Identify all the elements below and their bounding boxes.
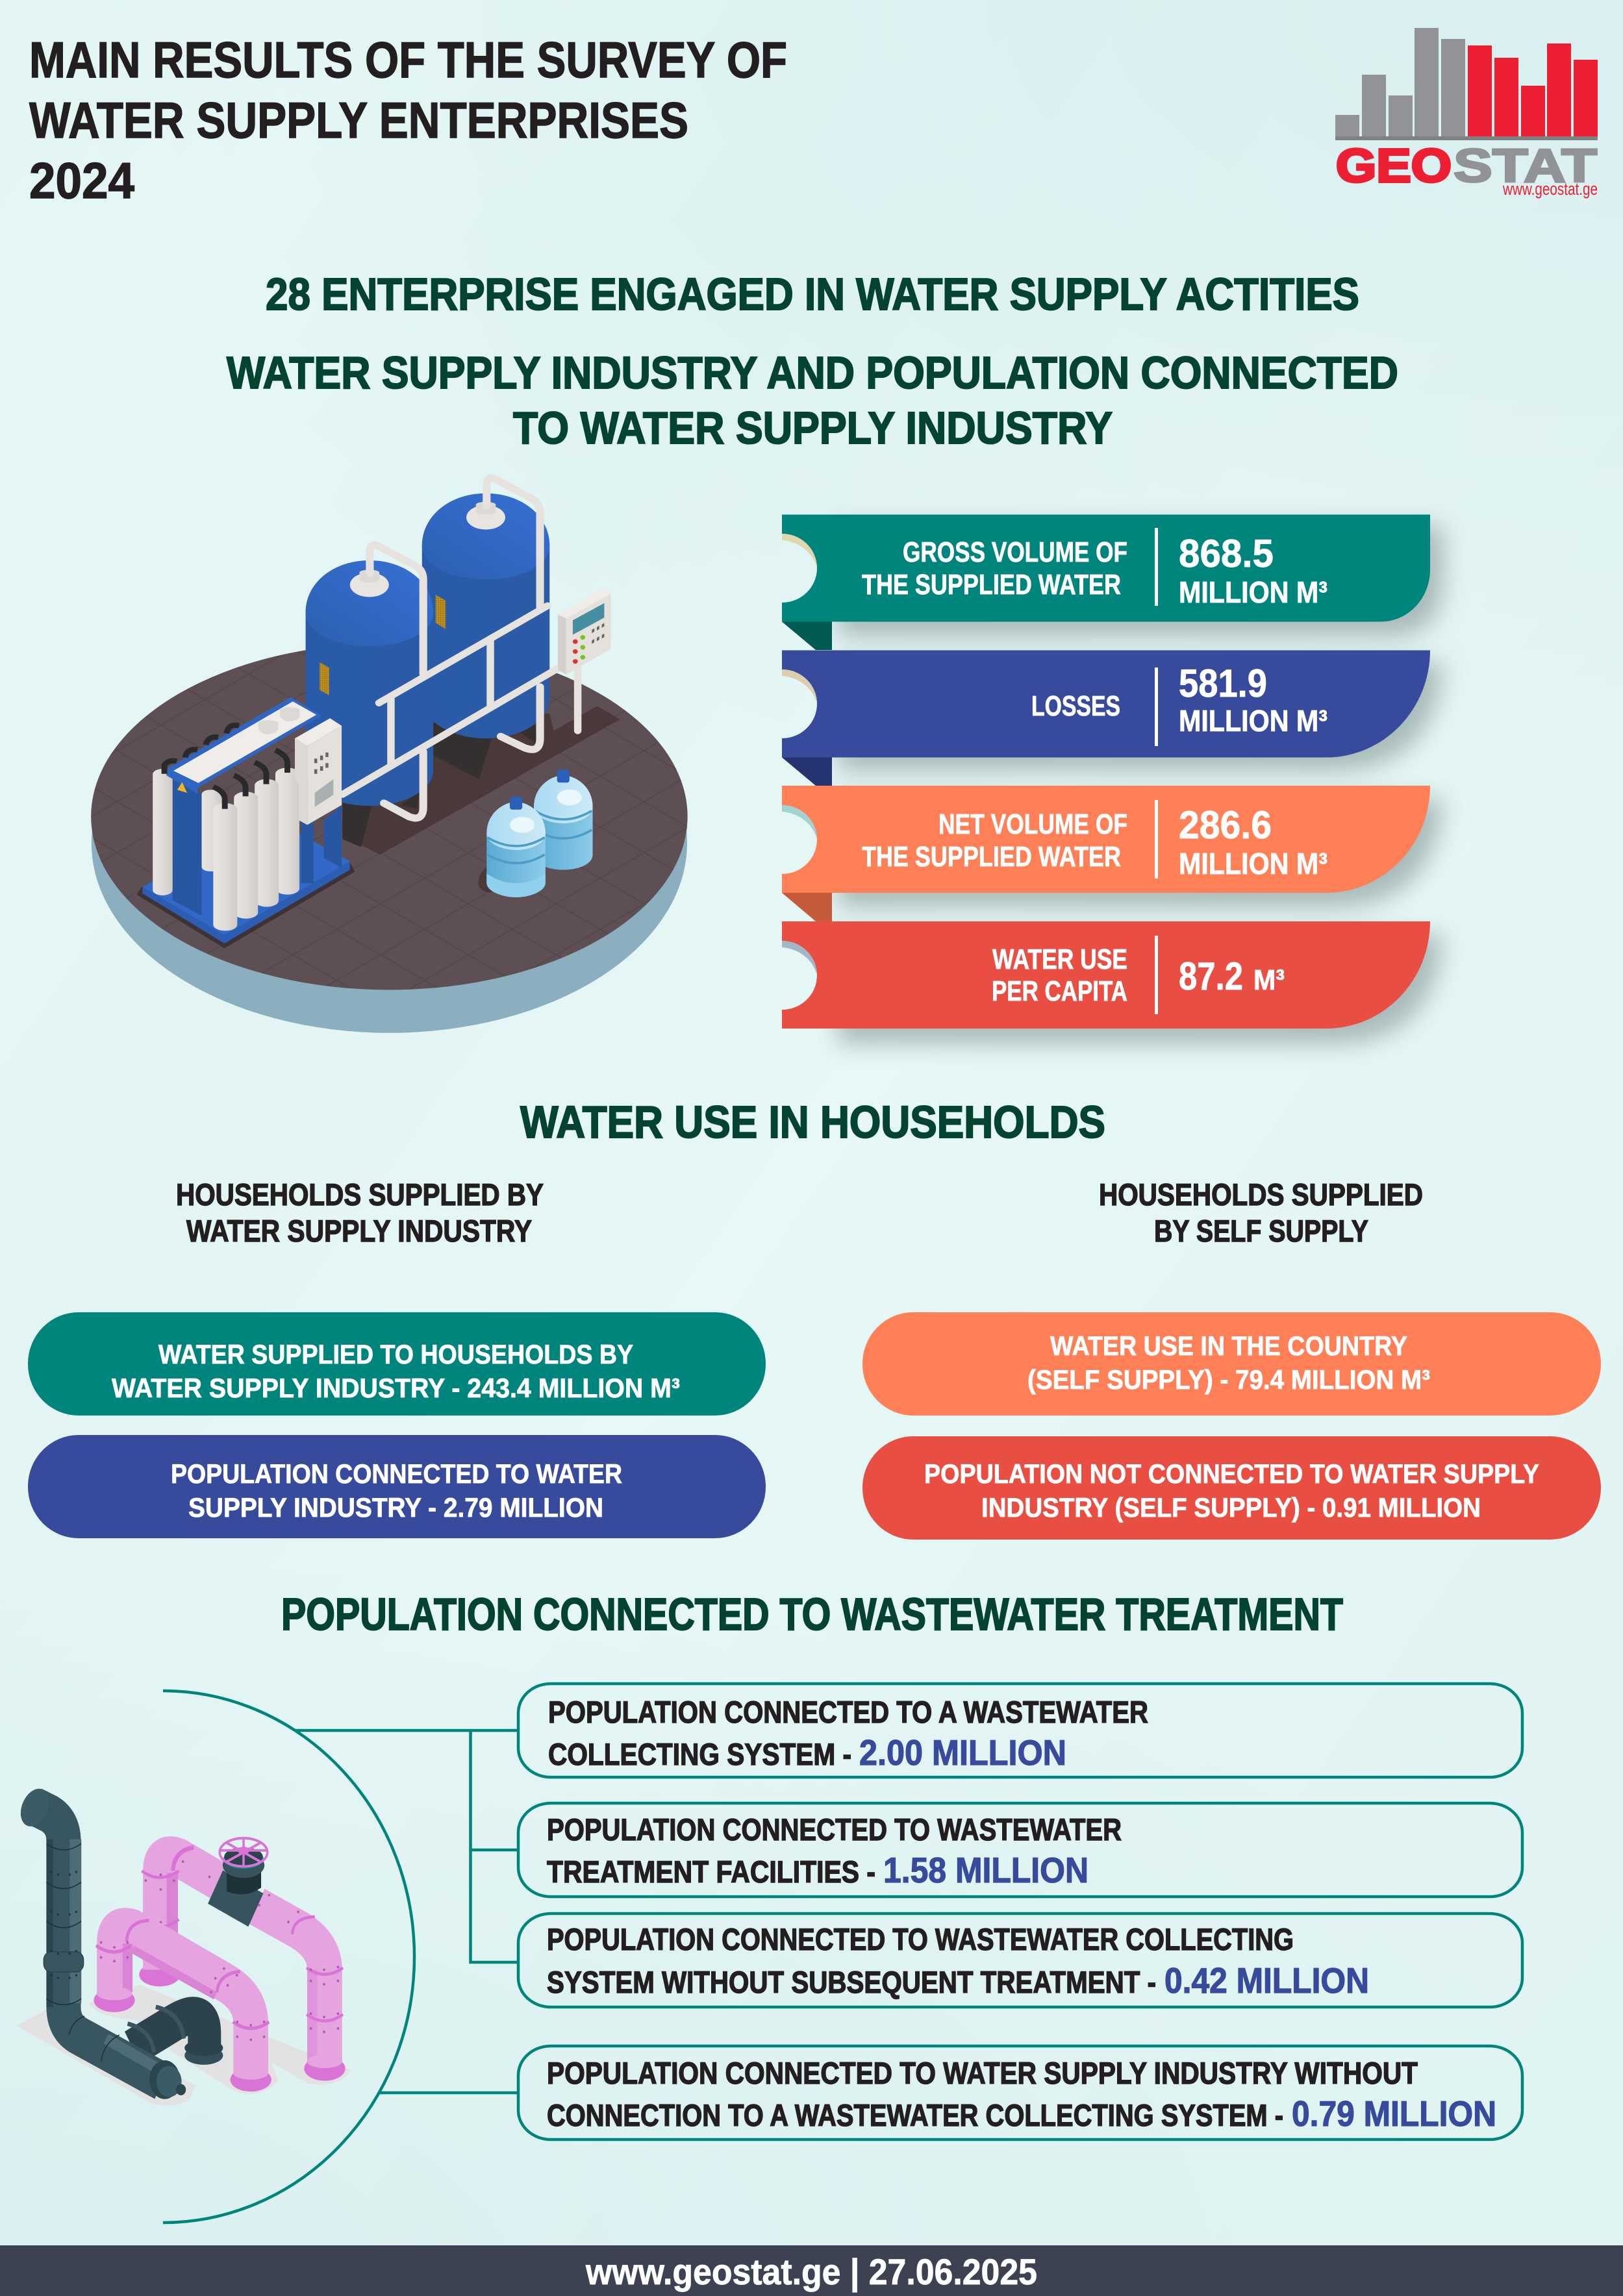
subheading: households self supply bbox=[1099, 1177, 1423, 1248]
icon: pink pipe front bbox=[94, 1921, 271, 2091]
logo: Geostat bbox=[1335, 28, 1598, 199]
logo: Geostat: www.geostat.ge bbox=[1502, 179, 1598, 199]
subheading: households self supply: HOUSEHOLDS SUPPLIED bbox=[1099, 1177, 1423, 1212]
banner: per capita bbox=[782, 921, 1430, 1029]
pill: population not connected: INDUSTRY (SELF SUPPLY) - 0.91 MILLION bbox=[981, 1492, 1481, 1523]
heading: water use in households: WATER USE IN HOUSEHOLDS bbox=[520, 1097, 1105, 1147]
banner: gross volume: 868.5 bbox=[1179, 532, 1274, 575]
footer bbox=[0, 2245, 1623, 2296]
title: MAIN RESULTS OF THE SURVEY OF bbox=[29, 31, 787, 88]
panel: treatment facilities: 1.58 MILLION bbox=[883, 1850, 1088, 1890]
logo: Geostat: GEO bbox=[1336, 140, 1452, 192]
banner: net volume: 286.6 bbox=[1179, 803, 1272, 847]
banner: gross volume: MILLION M³ bbox=[1179, 575, 1327, 609]
panel: without collecting system: CONNECTION TO A WASTEWATER COLLECTING SYSTEM - bbox=[547, 2098, 1283, 2132]
pipes and control panel bbox=[342, 589, 611, 794]
banner: gross volume bbox=[782, 514, 1430, 650]
pill: population connected: POPULATION CONNECTED TO WATER bbox=[171, 1458, 622, 1489]
illustration: water treatment platform bbox=[91, 478, 688, 1033]
panel: collecting system: COLLECTING SYSTEM - bbox=[548, 1737, 851, 1771]
icon: filter rack bbox=[136, 697, 355, 948]
icon: back tank bbox=[422, 478, 549, 779]
panel: supply figures bbox=[782, 514, 1443, 1044]
icon: water bottles bbox=[478, 769, 593, 897]
heading: enterprises: 28 ENTERPRISE ENGAGED IN WATER SUPPLY ACTITIES bbox=[266, 269, 1359, 319]
pill: water use self supply bbox=[862, 1312, 1601, 1416]
banner: losses: MILLION M³ bbox=[1179, 704, 1327, 738]
pill: population connected bbox=[28, 1435, 766, 1538]
banner: losses: LOSSES bbox=[1031, 690, 1120, 722]
title: WATER SUPPLY ENTERPRISES bbox=[29, 92, 688, 149]
banner: losses bbox=[782, 651, 1430, 786]
icon: front tank bbox=[306, 545, 433, 847]
panel: treatment facilities: TREATMENT FACILITIES - bbox=[547, 1854, 875, 1889]
banner shadows bbox=[838, 526, 1443, 1044]
subheading: households self supply: BY SELF SUPPLY bbox=[1154, 1214, 1368, 1248]
pill: water supplied to households: WATER SUPPLIED TO HOUSEHOLDS BY bbox=[158, 1339, 633, 1369]
panel: collecting system: 2.00 MILLION bbox=[859, 1732, 1066, 1773]
banner: per capita: PER CAPITA bbox=[992, 975, 1127, 1007]
connector lines bbox=[163, 1691, 518, 2223]
heading: wastewater treatment: POPULATION CONNECTED TO WASTEWATER TREATMENT bbox=[281, 1589, 1343, 1640]
pill: population not connected: POPULATION NOT CONNECTED TO WATER SUPPLY bbox=[924, 1458, 1539, 1489]
panel: collecting system: POPULATION CONNECTED TO A WASTEWATER bbox=[548, 1695, 1148, 1729]
logo: Geostat: STAT bbox=[1453, 140, 1597, 192]
panel: without collecting system: POPULATION CONNECTED TO WATER SUPPLY INDUSTRY WITHOUT bbox=[547, 2056, 1418, 2090]
subheading: households supplied by industry: HOUSEHOLDS SUPPLIED BY bbox=[176, 1177, 544, 1212]
banner: losses: 581.9 bbox=[1179, 662, 1267, 705]
banner: per capita: 87.2 bbox=[1179, 955, 1243, 998]
banner: net volume: MILLION M³ bbox=[1179, 847, 1327, 880]
panel: without collecting system bbox=[518, 2046, 1522, 2140]
panel: without collecting system: 0.79 MILLION bbox=[1292, 2093, 1496, 2134]
subheading: households supplied by industry: WATER SUPPLY INDUSTRY bbox=[186, 1214, 532, 1248]
banner: gross volume: GROSS VOLUME OF bbox=[903, 536, 1127, 568]
icon: dark pipe front bbox=[15, 1783, 186, 2099]
subheading: households supplied by industry bbox=[176, 1177, 544, 1248]
banner: net volume: THE SUPPLIED WATER bbox=[862, 841, 1121, 873]
heading: water supply industry: TO WATER SUPPLY INDUSTRY bbox=[513, 403, 1113, 453]
banner: gross volume: THE SUPPLIED WATER bbox=[862, 569, 1121, 601]
platform disc bbox=[91, 643, 688, 1033]
panel: treatment facilities bbox=[518, 1803, 1522, 1897]
panel: without subsequent treatment bbox=[518, 1914, 1522, 2007]
title: 2024 bbox=[29, 152, 134, 209]
pipe ground shadows bbox=[17, 1984, 351, 2106]
banner: per capita: M³ bbox=[1253, 964, 1285, 996]
pill: water supplied to households bbox=[28, 1312, 766, 1416]
icon: pink pipe back bbox=[139, 1847, 346, 2081]
banner: net volume bbox=[782, 786, 1430, 921]
footer: www.geostat.ge | 27.06.2025 bbox=[585, 2251, 1037, 2293]
pill: population not connected bbox=[862, 1436, 1601, 1540]
pill: population connected: SUPPLY INDUSTRY - 2.79 MILLION bbox=[188, 1492, 603, 1523]
banner: net volume: NET VOLUME OF bbox=[938, 808, 1127, 840]
pill: water supplied to households: WATER SUPPLY INDUSTRY - 243.4 MILLION M³ bbox=[112, 1373, 680, 1403]
title bbox=[29, 31, 787, 209]
icon: dark pipe back bbox=[127, 2007, 223, 2065]
panel: without subsequent treatment: 0.42 MILLION bbox=[1164, 1960, 1369, 2001]
pill: water use self supply: (SELF SUPPLY) - 79.4 MILLION M³ bbox=[1027, 1364, 1430, 1395]
heading: water supply industry: WATER SUPPLY INDUSTRY AND POPULATION CONNECTED bbox=[227, 347, 1398, 398]
panel: without subsequent treatment: POPULATION CONNECTED TO WASTEWATER COLLECTING bbox=[547, 1922, 1294, 1956]
pill: water use self supply: WATER USE IN THE COUNTRY bbox=[1050, 1330, 1407, 1361]
heading: water supply industry bbox=[227, 347, 1398, 453]
panel: treatment facilities: POPULATION CONNECTED TO WASTEWATER bbox=[547, 1812, 1122, 1847]
icon: valve bbox=[216, 1838, 268, 1910]
panel: without subsequent treatment: SYSTEM WITHOUT SUBSEQUENT TREATMENT - bbox=[547, 1965, 1156, 1999]
illustration: pipes bbox=[15, 1783, 351, 2106]
banner: per capita: WATER USE bbox=[992, 943, 1127, 975]
panel: collecting system bbox=[518, 1684, 1522, 1777]
